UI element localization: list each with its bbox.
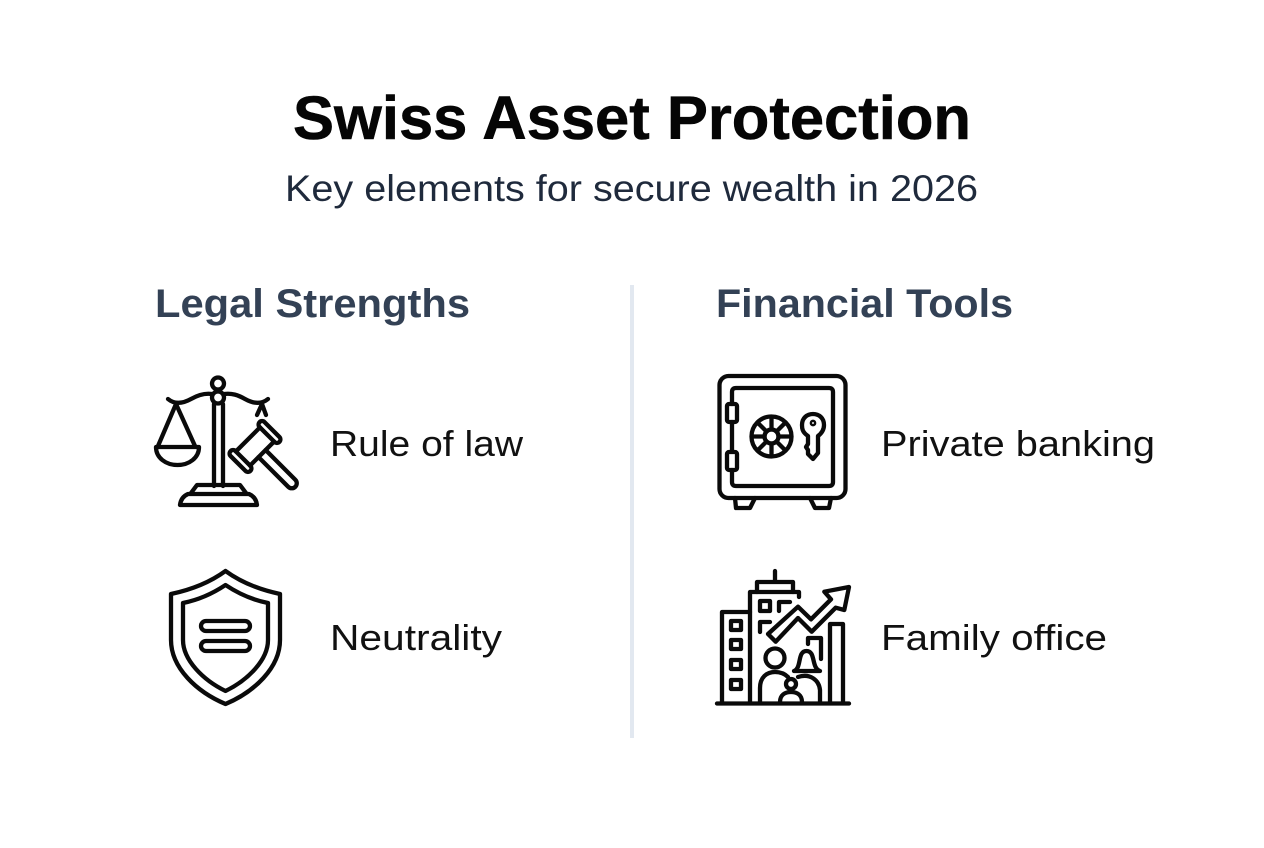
icon: shield bbox=[171, 571, 280, 704]
heading: legal strengths: Legal Strengths bbox=[155, 282, 470, 326]
icon: buildings, growth arrow and family bbox=[717, 571, 849, 704]
heading: financial tools: Financial Tools bbox=[716, 282, 1013, 326]
label: rule of law: Rule of law bbox=[330, 423, 524, 464]
subtitle: Key elements for secure wealth in 2026 bbox=[285, 168, 978, 209]
panel: financial tools bbox=[716, 282, 1155, 704]
title: Swiss Asset Protection bbox=[293, 84, 971, 152]
label: neutrality: Neutrality bbox=[330, 617, 502, 658]
icon: safe with key bbox=[720, 376, 846, 508]
panel: legal strengths bbox=[155, 282, 524, 704]
label: family office: Family office bbox=[881, 617, 1107, 658]
divider bbox=[630, 285, 634, 738]
label: private banking: Private banking bbox=[881, 423, 1155, 464]
icon: scales and gavel bbox=[156, 378, 312, 505]
